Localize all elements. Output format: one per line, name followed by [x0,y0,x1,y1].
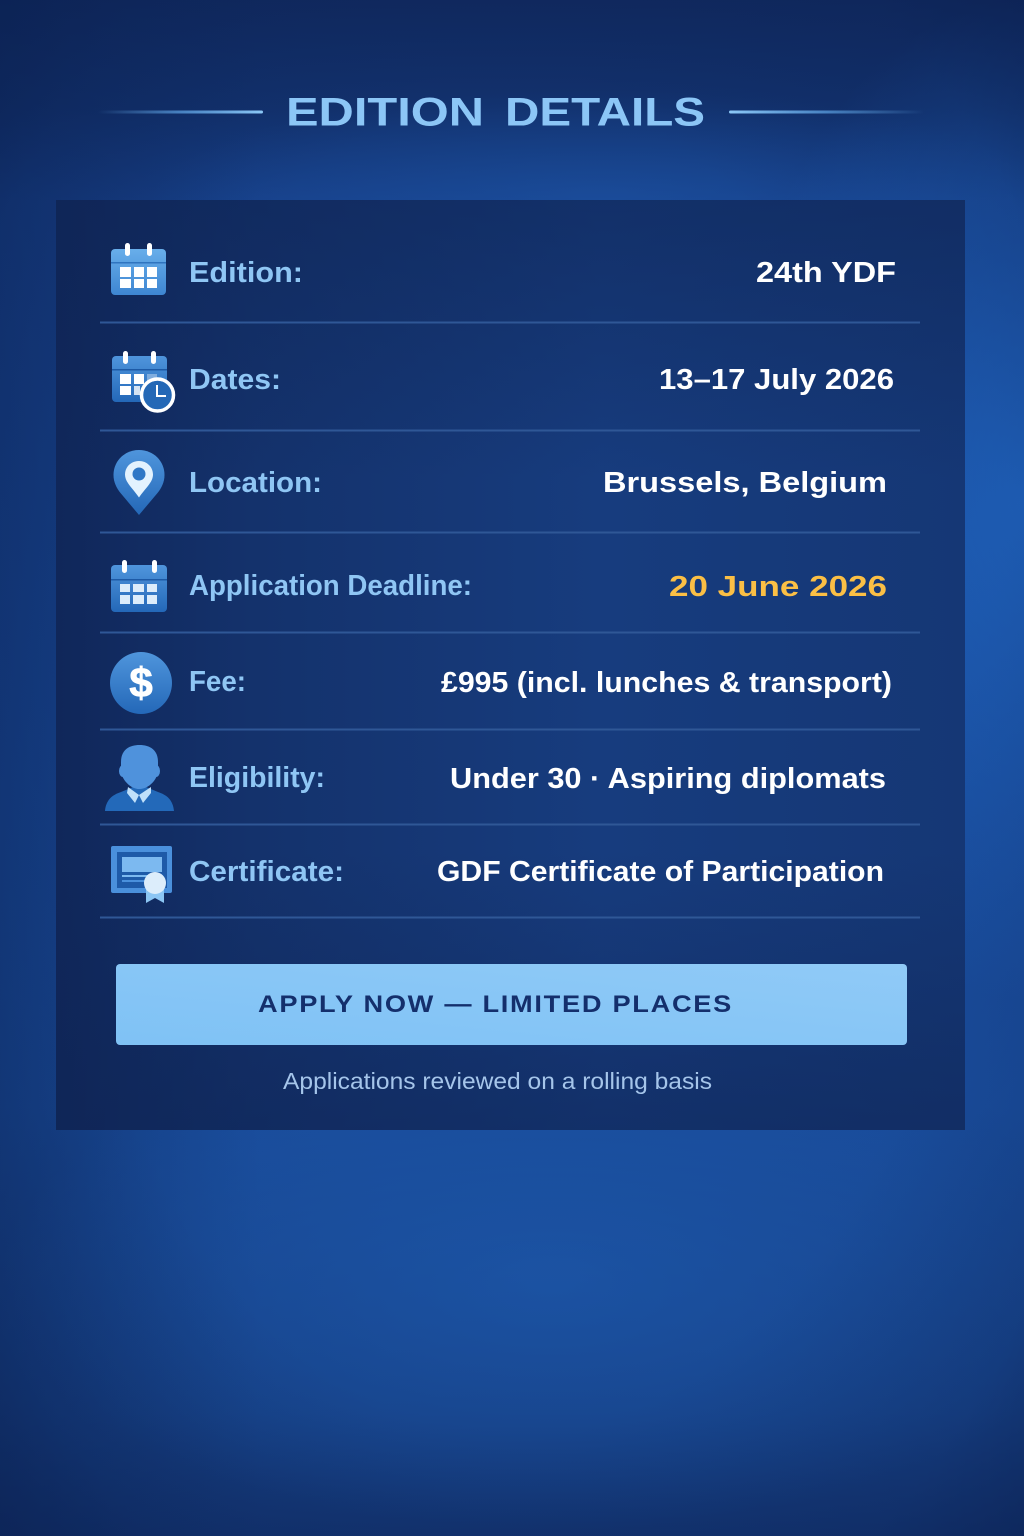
row: location [114,450,887,515]
title: EDITION [286,90,484,134]
value: eligibility: Under 30 · Aspiring diplomats [450,763,886,795]
value: fee: £995 (incl. lunches & transport) [441,667,892,699]
icon: certificate [111,846,172,903]
label: dates: Dates: [189,364,281,396]
label: certificate: Certificate: [189,856,344,888]
row: dates [112,351,894,411]
icon: map pin [114,450,164,515]
title: DETAILS [505,90,705,134]
row: certificate [111,846,884,903]
footnote: Applications reviewed on a rolling basis [283,1068,712,1094]
row: application deadline [111,560,887,612]
icon: dollar coin: $ [129,659,153,706]
row: fee [110,652,892,714]
row: eligibility [105,745,886,811]
label: edition: Edition: [189,257,303,289]
label: application deadline: Application Deadline: [189,570,472,602]
icon: dollar coin [110,652,172,714]
value: location: Brussels, Belgium [603,467,887,499]
label: location: Location: [189,467,322,499]
value: certificate: GDF Certificate of Participation [437,856,884,888]
value: application deadline: 20 June 2026 [669,571,887,603]
button: apply now: APPLY NOW — LIMITED PLACES [258,991,733,1018]
icon: calendar [111,560,167,612]
label: fee: Fee: [189,666,246,698]
label: eligibility: Eligibility: [189,762,325,794]
icon: calendar [111,243,166,295]
button: apply now [116,964,907,1045]
title [98,90,924,134]
value: edition: 24th YDF [756,257,896,289]
panel: edition details [56,200,965,1130]
icon: person [105,745,174,811]
icon: calendar with clock [112,351,174,411]
row: edition [111,243,896,295]
value: dates: 13–17 July 2026 [659,364,894,396]
